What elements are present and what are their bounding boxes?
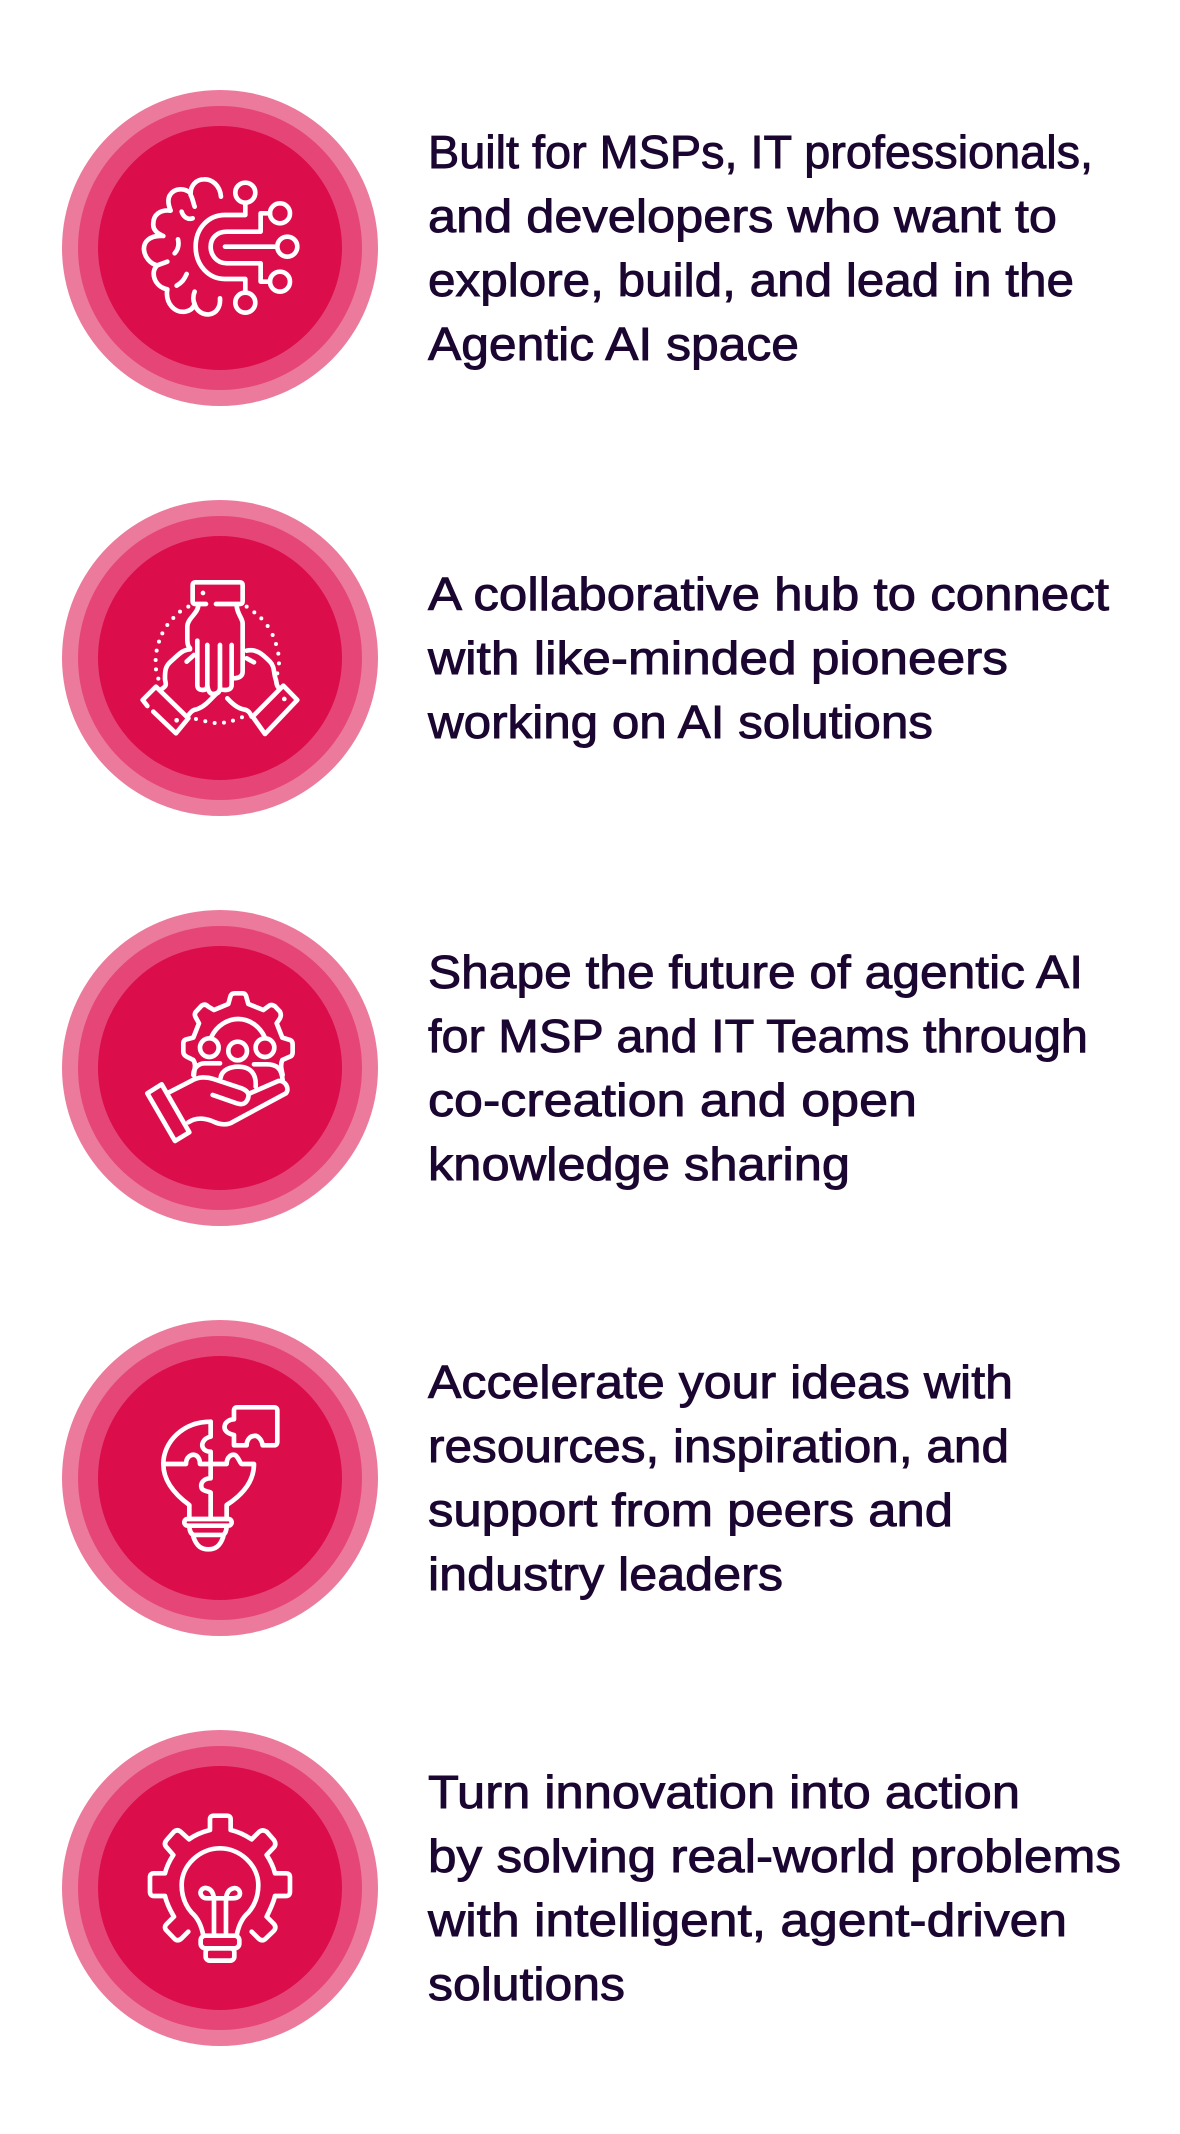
text block 1: explore, build, and lead in the: [428, 254, 1074, 306]
badge: concentric circles 1: [62, 90, 378, 406]
text block 2: A collaborative hub to connect: [428, 568, 1109, 620]
panel: item 1 built for MSPs: [62, 90, 1093, 406]
icon: three joined hands: [143, 582, 297, 734]
text block 1: Built for MSPs, IT professionals,: [428, 126, 1093, 178]
text block 3: [428, 946, 1088, 1190]
text block 2: with like-minded pioneers: [427, 632, 1008, 684]
text block 2: working on AI solutions: [427, 696, 933, 748]
panel: item 5 innovation into action: [62, 1730, 1121, 2046]
panel: item 2 collaborative hub: [62, 500, 1109, 816]
badge: concentric circles 2: [62, 500, 378, 816]
text block 2: [427, 568, 1109, 748]
icon: brain with circuit: [144, 179, 297, 314]
text block 5: Turn innovation into action: [428, 1766, 1020, 1818]
text block 5: [427, 1766, 1121, 2010]
icon: gear with light bulb: [150, 1816, 290, 1961]
text block 3: for MSP and IT Teams through: [428, 1010, 1088, 1062]
icon: puzzle light bulb: [163, 1407, 277, 1549]
panel: item 3 shape the future: [62, 910, 1088, 1226]
text block 1: [428, 126, 1093, 370]
text block 3: knowledge sharing: [428, 1138, 850, 1190]
text block 4: support from peers and: [428, 1484, 953, 1536]
text block 5: by solving real-world problems: [428, 1830, 1121, 1882]
text block 4: Accelerate your ideas with: [428, 1356, 1013, 1408]
text block 4: resources, inspiration, and: [428, 1420, 1009, 1472]
badge: concentric circles 3: [62, 910, 378, 1226]
text block 1: and developers who want to: [428, 190, 1057, 242]
badge: concentric circles 5: [62, 1730, 378, 2046]
text block 5: solutions: [428, 1958, 625, 2010]
text block 4: industry leaders: [428, 1548, 783, 1600]
badge: concentric circles 4: [62, 1320, 378, 1636]
text block 4: [428, 1356, 1013, 1600]
text block 5: with intelligent, agent-driven: [427, 1894, 1067, 1946]
text block 1: Agentic AI space: [428, 318, 799, 370]
text block 3: Shape the future of agentic AI: [428, 946, 1083, 998]
icon: hand holding gear with people: [147, 993, 293, 1141]
text block 3: co-creation and open: [428, 1074, 917, 1126]
panel: item 4 accelerate ideas: [62, 1320, 1013, 1636]
